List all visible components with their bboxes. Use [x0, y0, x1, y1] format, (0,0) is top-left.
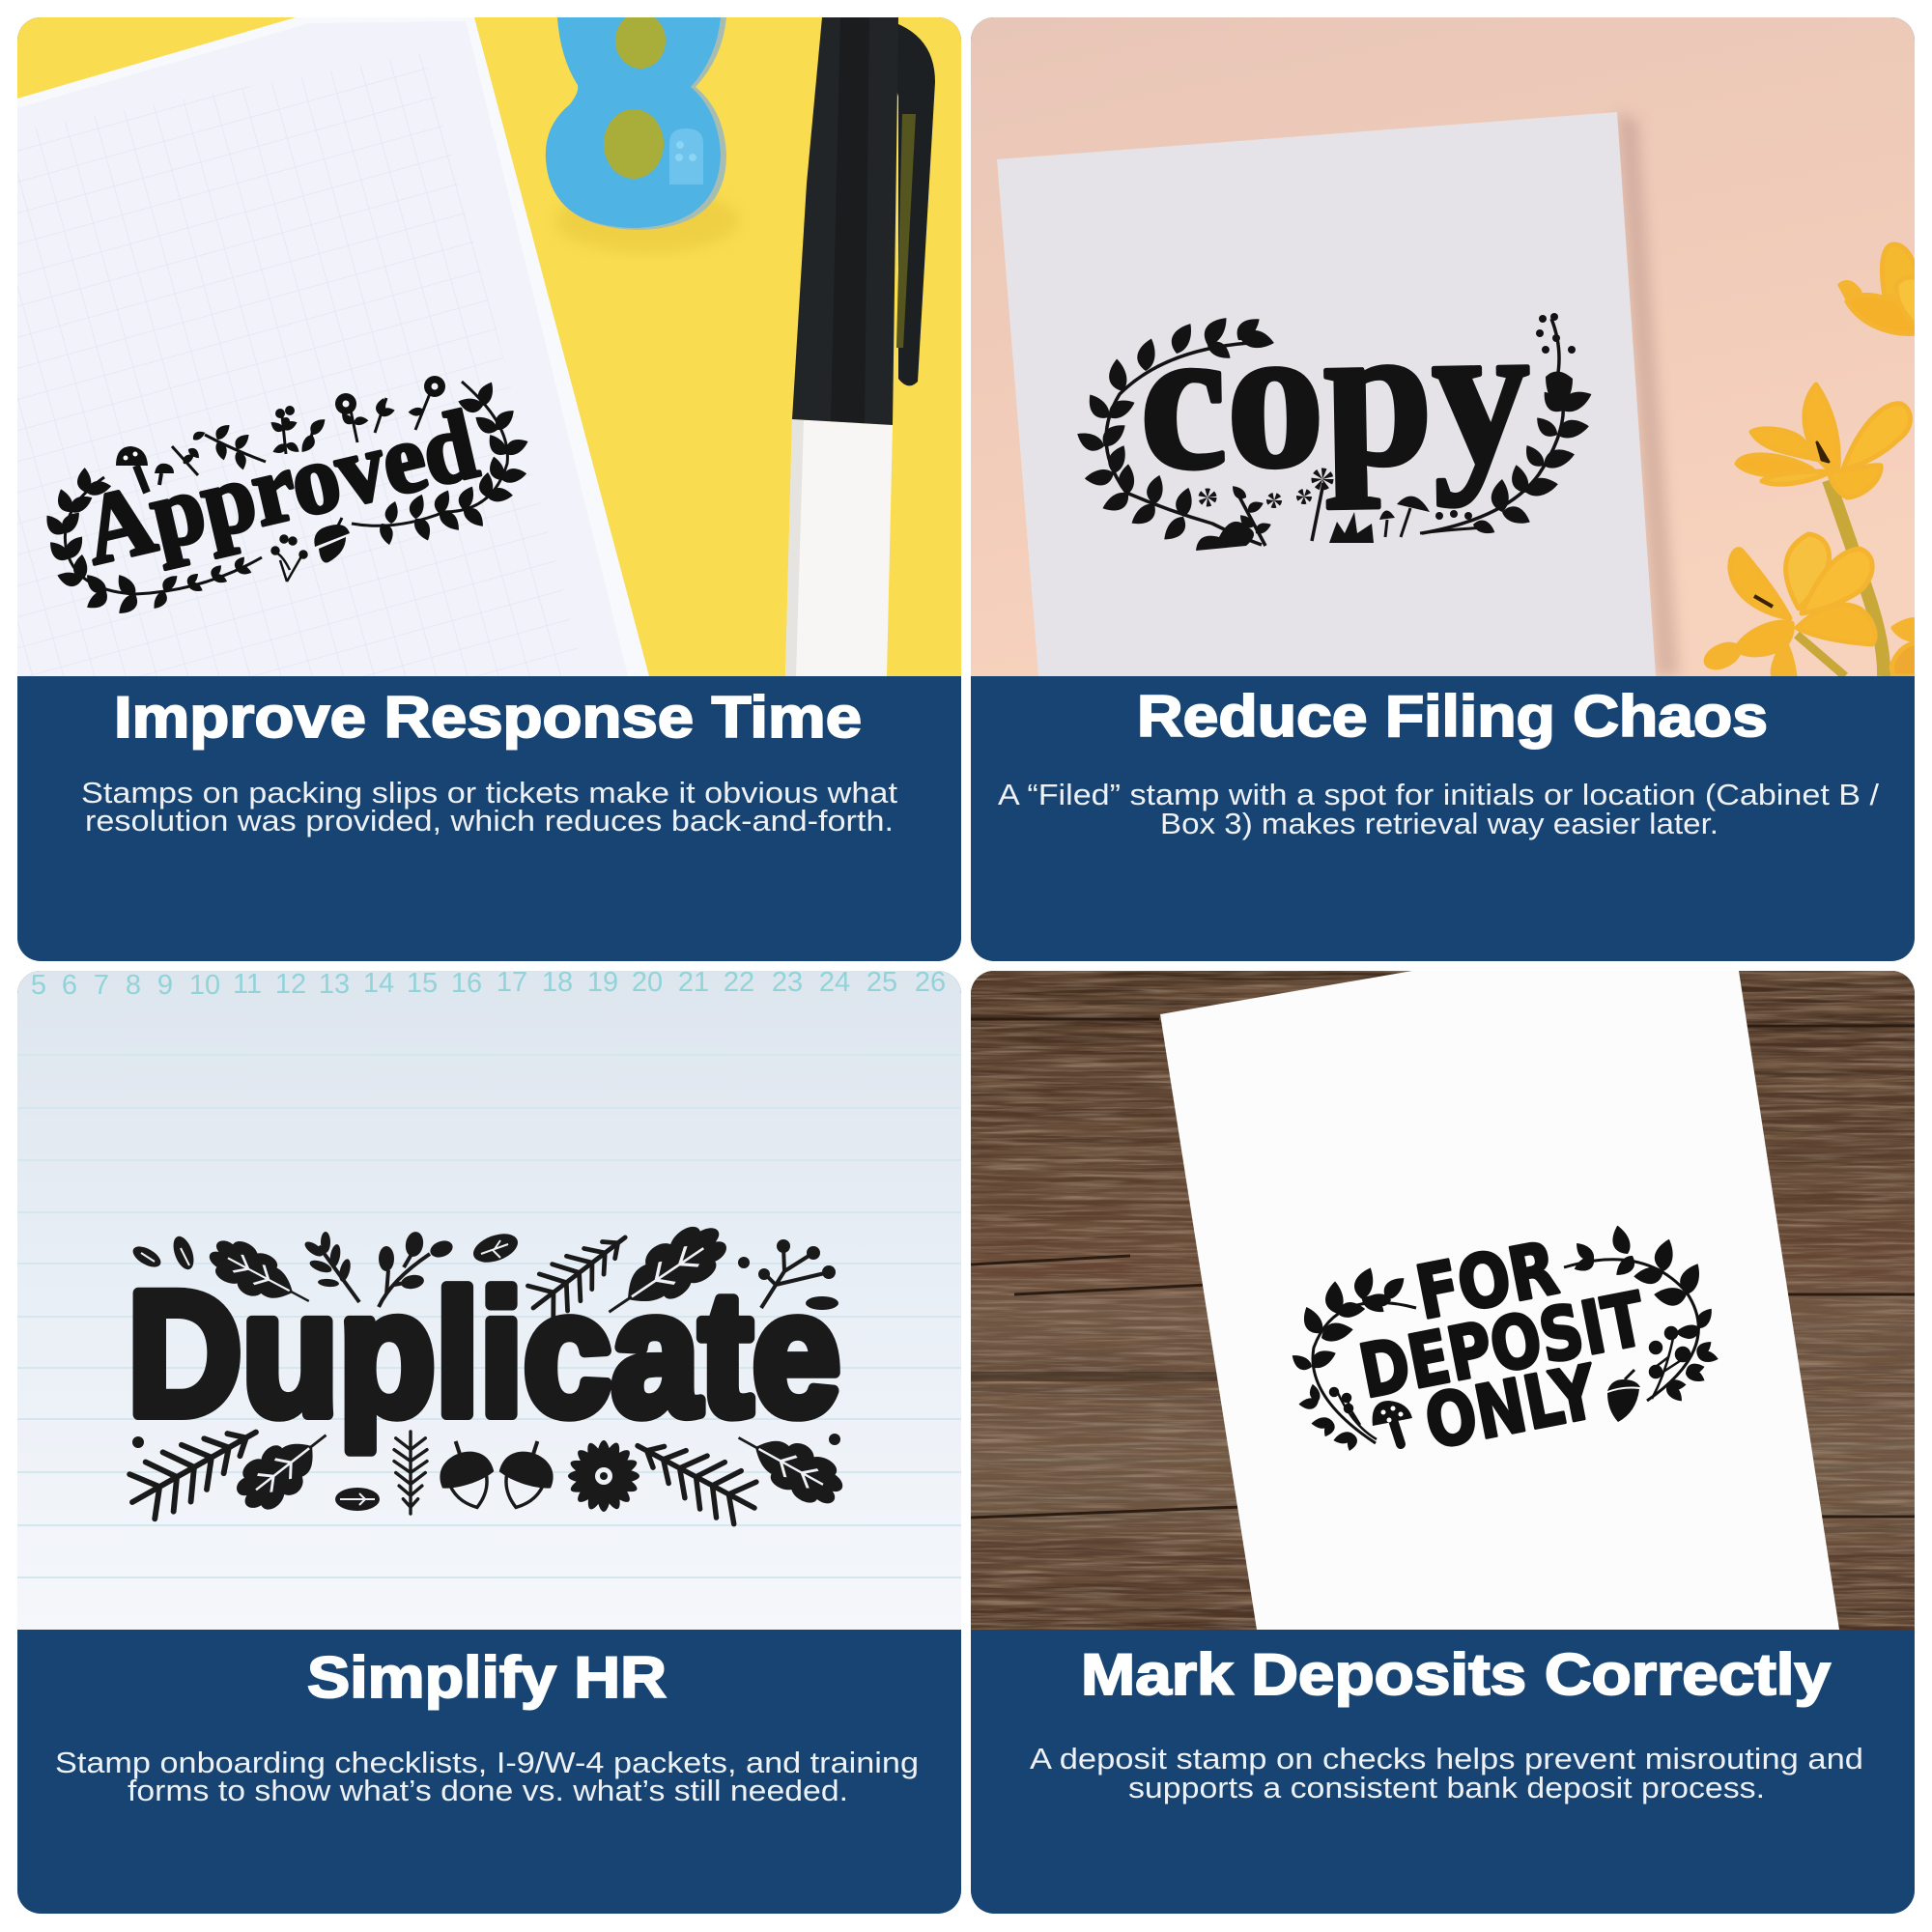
ruler numbers: 17 [497, 967, 527, 998]
ruler numbers: 24 [819, 967, 850, 998]
notebook page [17, 17, 649, 676]
stamp: For Deposit Only: DEPOSIT [1352, 1275, 1652, 1415]
ruler numbers [32, 972, 945, 995]
ruler numbers: 21 [678, 967, 709, 998]
ruler numbers: 8 [126, 970, 141, 1001]
icon: acorn [1607, 1370, 1640, 1422]
ruler numbers: 5 [31, 970, 46, 1001]
ruler numbers: 13 [319, 969, 350, 1000]
stamp: Approved: Approved [74, 390, 487, 585]
icon: mushrooms [116, 446, 174, 493]
text: improve response time body: resolution was provided, which reduces back-and-forth. [85, 804, 894, 838]
text: reduce filing chaos body: A “Filed” stamp with a spot for initials or location (Cabinet B / [998, 778, 1879, 811]
ruler numbers: 23 [772, 967, 803, 998]
text: mark deposits correctly body: supports a consistent bank deposit process. [1128, 1771, 1765, 1804]
stamp: copy: copy [1138, 278, 1532, 512]
ruler numbers: 18 [542, 967, 573, 998]
ruler numbers: 9 [157, 970, 173, 1001]
panel: mark deposits correctly [971, 971, 1915, 1914]
ruler numbers: 20 [632, 967, 663, 998]
photo: white card on peach with yellow flowers [971, 17, 1918, 676]
icon: black and white marker [785, 17, 935, 676]
text: simplify hr body: forms to show what’s done vs. what’s still needed. [128, 1774, 848, 1807]
white sheet [1160, 971, 1839, 1630]
white card [997, 112, 1656, 676]
icon: acorn [1546, 371, 1573, 403]
text: mark deposits correctly body: A deposit stamp on checks helps prevent misrouting and [1030, 1742, 1863, 1776]
heading: mark deposits correctly: Mark Deposits Correctly [1081, 1642, 1832, 1707]
heading: simplify hr: Simplify HR [307, 1645, 667, 1710]
icon: acorn [314, 518, 350, 562]
panel: reduce filing chaos [971, 17, 1918, 961]
icon: bottom row leaves, acorns and flower [119, 1407, 852, 1531]
ruler numbers: 26 [915, 967, 946, 998]
ruler numbers: 15 [407, 968, 438, 999]
ruler numbers: 7 [94, 970, 109, 1001]
icon: bottom plants and mushrooms [1329, 497, 1488, 543]
ruler numbers: 25 [867, 967, 897, 998]
stamp: Duplicate [119, 1212, 852, 1531]
ruler numbers: 6 [62, 970, 77, 1001]
heading: reduce filing chaos: Reduce Filing Chaos [1137, 684, 1768, 749]
ruler numbers: 10 [189, 970, 220, 1001]
photo: lined paper with ruler numbers [17, 967, 961, 1630]
text: simplify hr body [55, 1746, 919, 1807]
text: improve response time body: Stamps on packing slips or tickets make it obvious what [81, 776, 897, 810]
ruler numbers: 22 [724, 967, 754, 998]
heading: improve response time: Improve Response Time [114, 685, 862, 750]
icon: grass mound [1196, 522, 1254, 551]
stamp: For Deposit Only: FOR [1409, 1225, 1564, 1336]
icon: yellow flowers [1702, 244, 1918, 676]
ruler numbers: 16 [451, 968, 482, 999]
panel: improve response time [17, 13, 961, 961]
stamp: copy [1077, 313, 1592, 551]
ruler numbers: 12 [275, 969, 306, 1000]
text: reduce filing chaos body [998, 778, 1879, 840]
ruler numbers: 14 [363, 968, 394, 999]
ruler numbers: 19 [587, 967, 618, 998]
stamp: For Deposit Only: ONLY [1418, 1349, 1605, 1465]
icon: small flowers [335, 376, 445, 414]
stamp: For Deposit Only [1289, 1224, 1719, 1465]
icon: blue number eight [546, 13, 726, 230]
icon: mushroom [1373, 1401, 1412, 1444]
icon: top row leaves and sprigs [129, 1212, 838, 1334]
photo: white sheet on wooden table [971, 971, 1915, 1630]
text: mark deposits correctly body [1030, 1742, 1863, 1804]
photo: notebook, blue eight and marker on yellow [17, 13, 961, 676]
icon: berry sprigs [1330, 1327, 1690, 1439]
icon: berry sprig [272, 535, 307, 582]
panel: simplify hr [17, 967, 961, 1914]
ruler numbers: 11 [233, 969, 262, 1000]
text: reduce filing chaos body: Box 3) makes retrieval way easier later. [1160, 807, 1719, 840]
text: improve response time body [81, 776, 897, 838]
text: simplify hr body: Stamp onboarding checklists, I-9/W-4 packets, and training [55, 1746, 919, 1779]
stamp: Duplicate: Duplicate [128, 1255, 840, 1452]
